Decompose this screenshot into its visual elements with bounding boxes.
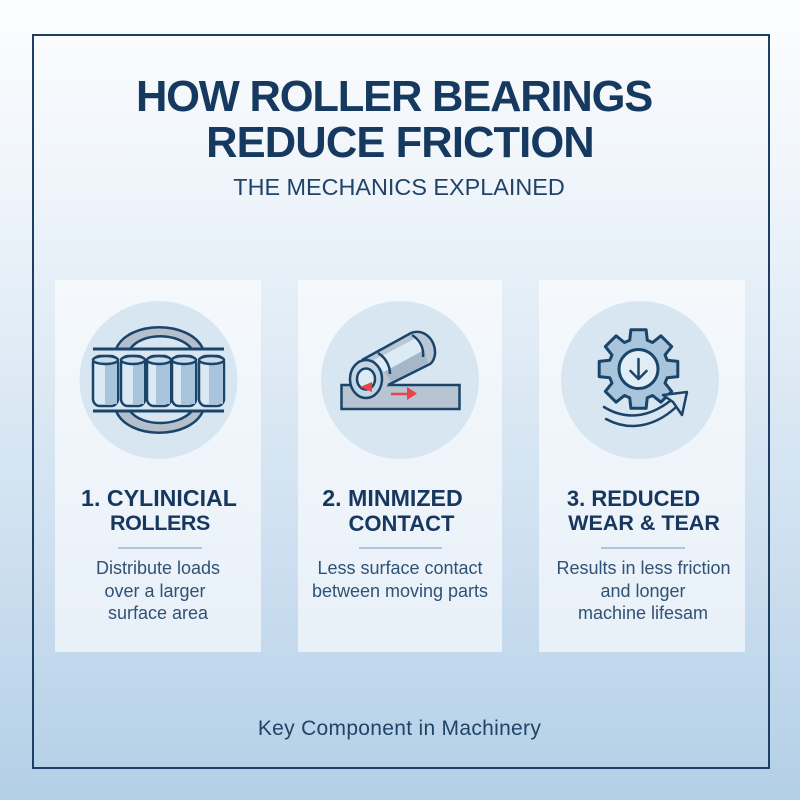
heading: panel 1: 1. CYLINICIAL [81, 485, 237, 511]
subtitle: THE MECHANICS EXPLAINED [233, 174, 565, 200]
heading: panel 2: 2. MINMIZED [322, 485, 463, 511]
text: panel 2 body: Less surface contact [317, 558, 483, 578]
panel: minimized contact [298, 280, 502, 652]
text: panel 2 body: between moving parts [312, 580, 488, 600]
heading: panel 3: WEAR & TEAR [568, 511, 720, 535]
text: panel 2 body [312, 558, 488, 601]
text: panel 1 body [96, 558, 220, 623]
text: panel 3 body: machine lifesam [578, 603, 708, 623]
heading: panel 1: ROLLERS [110, 511, 210, 535]
title [136, 73, 652, 167]
title: REDUCE FRICTION [206, 119, 594, 167]
heading: panel 2: CONTACT [349, 511, 454, 536]
text: panel 1 body: Distribute loads [96, 558, 220, 578]
text: panel 1 body: over a larger [104, 580, 206, 600]
heading: panel 1 [81, 485, 237, 535]
panel: reduced wear [539, 280, 745, 652]
title: HOW ROLLER BEARINGS [136, 73, 652, 121]
panel: cylindrical rollers [55, 280, 261, 652]
text: panel 1 body: surface area [108, 603, 208, 623]
heading: panel 3: 3. REDUCED [567, 486, 700, 511]
text: panel 3 body: Results in less friction [556, 558, 731, 578]
footer: Key Component in Machinery [258, 717, 541, 740]
heading: panel 2 [322, 485, 463, 536]
heading: panel 3 [567, 486, 720, 535]
text: panel 3 body [556, 558, 731, 623]
text: panel 3 body: and longer [600, 580, 686, 600]
